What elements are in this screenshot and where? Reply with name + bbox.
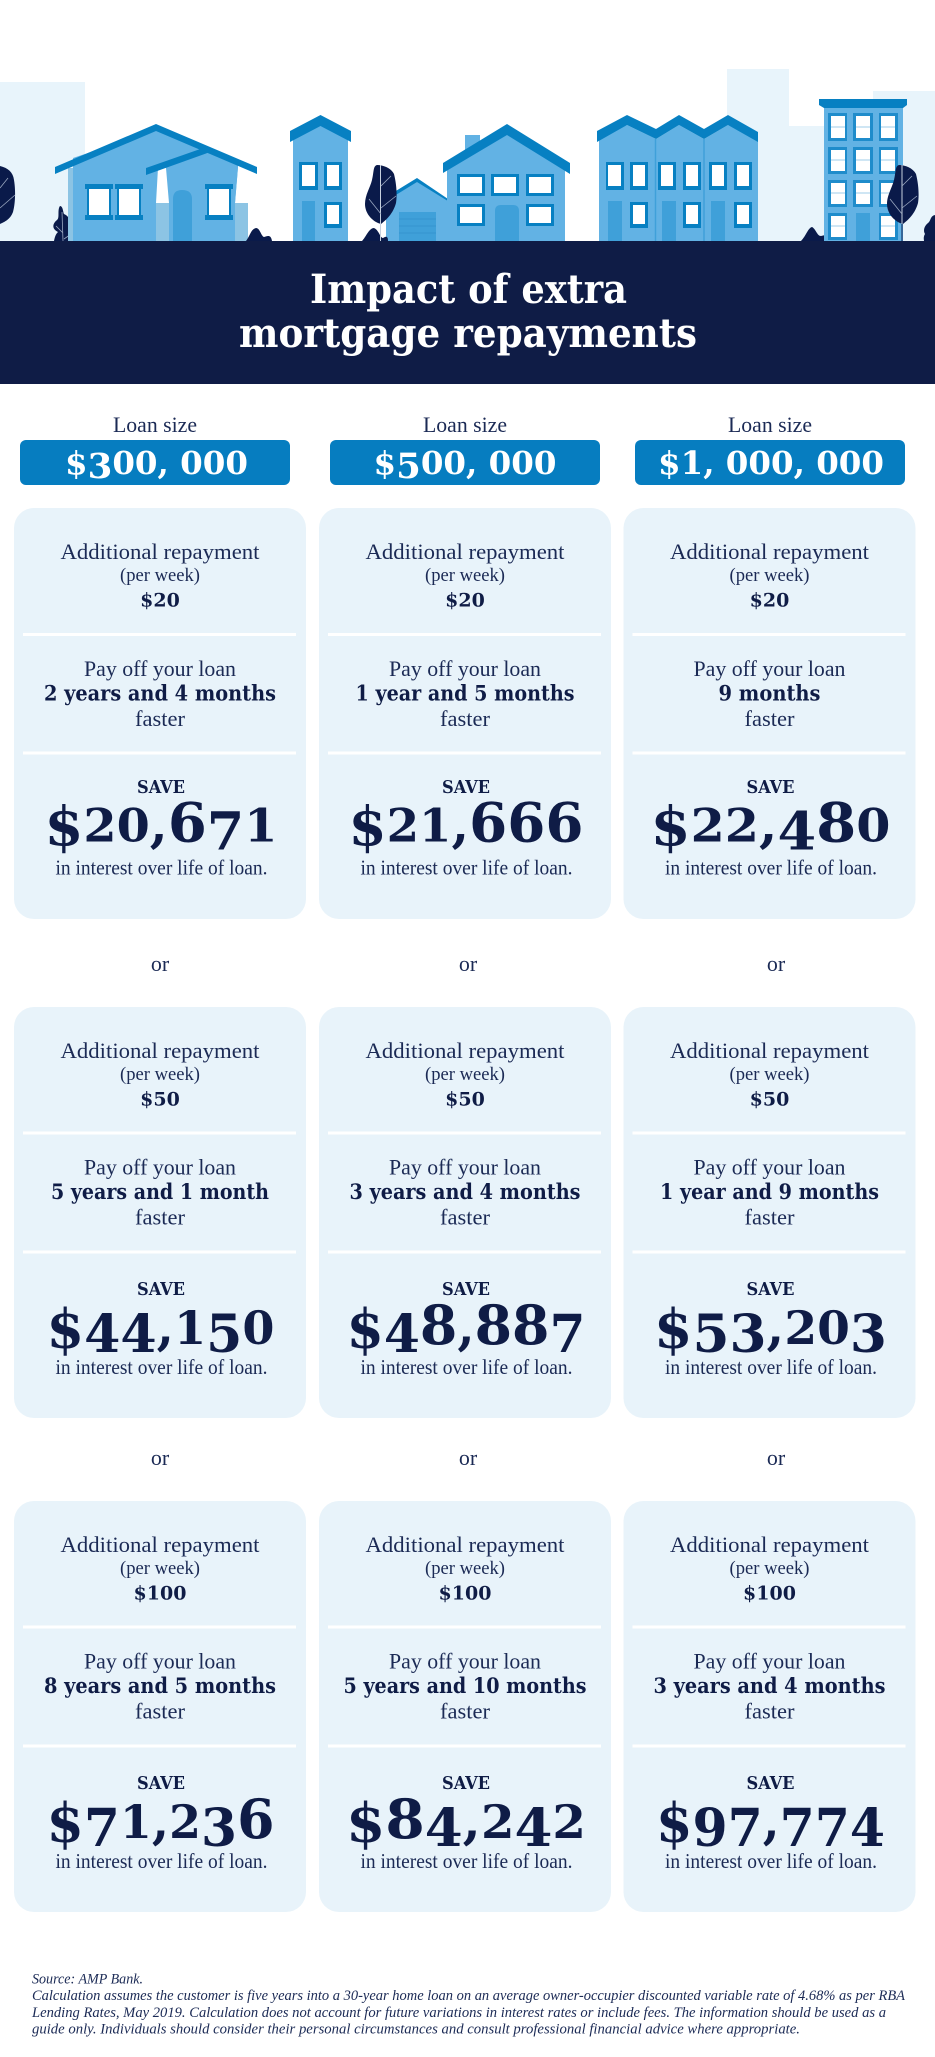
card: $500,000 at $50 per week: $48,887 [346, 1293, 585, 1365]
card: $300,000 at $100 per week: 8 years and 5 months [44, 1673, 276, 1698]
right tree [887, 165, 919, 241]
card: $1,000,000 at $50 per week: faster [744, 1204, 795, 1230]
source and disclaimer footnote: Calculation assumes the customer is five years into a 30-year home loan on an average owner-occupier discounted variable rate of 4.68% as per RBA [32, 1988, 905, 2004]
card: $500,000 at $50 per week [319, 1007, 611, 1418]
card: $500,000 at $20 per week: $21,666 [348, 790, 584, 858]
card: $500,000 at $50 per week: Pay off your loan [389, 1154, 541, 1180]
house 1: bungalow [55, 124, 257, 241]
card: $1,000,000 at $100 per week: 3 years and 4 months [654, 1673, 886, 1698]
or separators row 2: or [767, 1445, 786, 1470]
card: $1,000,000 at $100 per week [624, 1501, 916, 1912]
card: $500,000 at $50 per week: Additional repayment [366, 1038, 564, 1063]
or separators row 1: or [767, 951, 786, 976]
card: $1,000,000 at $50 per week: Pay off your loan [694, 1154, 846, 1180]
card: $1,000,000 at $50 per week: SAVE [746, 1279, 794, 1300]
background buildings [0, 69, 935, 242]
card: $300,000 at $20 per week: $20,671 [44, 790, 278, 862]
card: $300,000 at $50 per week: Pay off your loan [84, 1154, 236, 1180]
card: $300,000 at $50 per week: Additional repayment [60, 1038, 260, 1063]
card: $1,000,000 at $100 per week: (per week) [730, 1559, 810, 1579]
card: $300,000 at $50 per week: $50 [140, 1088, 180, 1110]
card: $1,000,000 at $50 per week: 1 year and 9 months [660, 1179, 879, 1204]
or separators row 2: or [459, 1445, 478, 1470]
card: $500,000 at $100 per week: 5 years and 10 months [344, 1673, 586, 1698]
house 5: terrace row [597, 115, 758, 241]
card: $300,000 at $50 per week: 5 years and 1 month [51, 1179, 269, 1204]
card: $1,000,000 at $50 per week: $53,203 [654, 1297, 887, 1365]
house 2: tall narrow [290, 115, 351, 241]
card: $1,000,000 at $20 per week: Pay off your loan [694, 656, 846, 681]
card: $500,000 at $20 per week: Pay off your loan [389, 656, 541, 681]
card: $1,000,000 at $50 per week: (per week) [730, 1065, 810, 1085]
card: $1,000,000 at $50 per week: in interest over life of loan. [665, 1355, 877, 1379]
card: $500,000 at $50 per week: 3 years and 4 months [350, 1179, 580, 1204]
card: $300,000 at $100 per week: $100 [134, 1582, 186, 1604]
card: $300,000 at $100 per week: $71,236 [46, 1787, 274, 1859]
card: $500,000 at $50 per week: in interest over life of loan. [360, 1355, 572, 1379]
or separators row 1 [151, 951, 786, 976]
card: $1,000,000 at $20 per week: $20 [750, 590, 789, 612]
or separators row 2 [151, 1445, 786, 1470]
card: $300,000 at $50 per week: (per week) [120, 1065, 200, 1085]
card: $1,000,000 at $20 per week: in interest over life of loan. [665, 856, 877, 880]
card: $500,000 at $50 per week: $50 [445, 1088, 485, 1110]
card: $300,000 at $20 per week: (per week) [120, 566, 200, 586]
title text [239, 266, 697, 357]
card: $500,000 at $20 per week: SAVE [442, 777, 490, 798]
card: $300,000 at $100 per week: Additional repayment [60, 1532, 260, 1557]
card: $500,000 at $50 per week: SAVE [442, 1279, 490, 1300]
card: $1,000,000 at $50 per week: $50 [750, 1088, 789, 1110]
bush right [801, 227, 829, 241]
card: $500,000 at $20 per week: faster [440, 706, 491, 731]
card: $500,000 at $100 per week: (per week) [425, 1559, 505, 1579]
card: $300,000 at $20 per week: Pay off your loan [84, 656, 236, 681]
card: $1,000,000 at $100 per week: SAVE [746, 1773, 794, 1794]
header illustration: skyline of houses [0, 69, 935, 242]
title text: mortgage repayments [239, 310, 697, 357]
card: $1,000,000 at $20 per week: 9 months [718, 680, 820, 706]
or separators row 2: or [151, 1445, 170, 1470]
card: $300,000 at $100 per week: (per week) [120, 1559, 200, 1579]
card: $500,000 at $100 per week: SAVE [442, 1773, 490, 1794]
card: $300,000 at $50 per week [14, 1007, 306, 1418]
loan size header: $300,000: Loan size [113, 412, 197, 437]
card: $500,000 at $100 per week: in interest over life of loan. [360, 1849, 572, 1873]
small left bush tree [53, 206, 74, 241]
house 3: garage [386, 178, 451, 241]
loan size header: $500,000: $500, 000 [374, 444, 556, 487]
card: $1,000,000 at $50 per week [624, 1007, 916, 1418]
far right bush [924, 215, 935, 241]
loan size header: $500,000: Loan size [423, 412, 507, 437]
house 4: two storey with chimney [443, 124, 570, 241]
card: $300,000 at $20 per week: $20 [140, 590, 180, 612]
loan size header: $300,000 [20, 412, 290, 487]
card: $1,000,000 at $100 per week: $100 [743, 1582, 796, 1604]
tree and bush centre [362, 165, 397, 241]
card: $300,000 at $20 per week: in interest over life of loan. [56, 856, 268, 880]
card: $300,000 at $100 per week [14, 1501, 306, 1912]
card: $500,000 at $100 per week: $84,242 [346, 1787, 586, 1859]
card: $300,000 at $100 per week: in interest over life of loan. [56, 1849, 268, 1873]
loan size header: $300,000: $300, 000 [65, 444, 248, 487]
card: $1,000,000 at $20 per week [624, 508, 916, 919]
loan size header: $1,000,000 [635, 412, 905, 485]
card: $1,000,000 at $100 per week: $97,774 [656, 1791, 885, 1859]
card: $300,000 at $100 per week: Pay off your loan [84, 1648, 236, 1674]
card: $500,000 at $100 per week: faster [440, 1698, 491, 1724]
loan size header: $1,000,000: Loan size [728, 412, 812, 437]
card: $500,000 at $50 per week: (per week) [425, 1065, 505, 1085]
card: $500,000 at $20 per week [319, 508, 611, 919]
source and disclaimer footnote: Source: AMP Bank. [32, 1972, 143, 1988]
card: $300,000 at $100 per week: SAVE [137, 1773, 185, 1794]
card: $300,000 at $20 per week [14, 508, 306, 919]
card: $500,000 at $100 per week [319, 1501, 611, 1912]
card: $1,000,000 at $100 per week: faster [744, 1698, 795, 1724]
card: $1,000,000 at $50 per week: Additional repayment [670, 1038, 869, 1063]
card: $300,000 at $20 per week: SAVE [137, 777, 185, 798]
card: $300,000 at $100 per week: faster [135, 1698, 186, 1724]
card: $1,000,000 at $20 per week: Additional repayment [670, 539, 869, 564]
loan size header: $500,000 [330, 412, 600, 487]
source and disclaimer footnote: Lending Rates, May 2019. Calculation does not account for future variations in interest rates or include fees. The information should be used as a [31, 2005, 886, 2021]
card: $1,000,000 at $20 per week: faster [744, 706, 795, 731]
left tree [0, 166, 15, 224]
card: $1,000,000 at $100 per week: Pay off your loan [694, 1648, 846, 1674]
card: $500,000 at $20 per week: 1 year and 5 months [356, 680, 574, 706]
card: $500,000 at $100 per week: Additional repayment [366, 1532, 564, 1557]
source and disclaimer footnote [31, 1972, 905, 2038]
card: $300,000 at $50 per week: in interest over life of loan. [56, 1355, 268, 1379]
card: $300,000 at $50 per week: $44,150 [46, 1297, 274, 1365]
card: $1,000,000 at $100 per week: in interest over life of loan. [665, 1849, 877, 1873]
card: $500,000 at $100 per week: Pay off your loan [389, 1648, 541, 1674]
card: $1,000,000 at $20 per week: (per week) [730, 566, 810, 586]
apartment building [819, 99, 907, 241]
card: $500,000 at $100 per week: $100 [439, 1582, 491, 1604]
loan size header: $1,000,000: $1, 000, 000 [658, 444, 884, 482]
or separators row 1: or [151, 951, 170, 976]
or separators row 1: or [459, 951, 478, 976]
card: $300,000 at $20 per week: 2 years and 4 months [44, 680, 276, 706]
card: $500,000 at $20 per week: in interest over life of loan. [360, 856, 572, 880]
card: $500,000 at $20 per week: (per week) [425, 566, 505, 586]
card: $500,000 at $20 per week: $20 [445, 590, 485, 612]
source and disclaimer footnote: guide only. Individuals should consider their personal circumstances and consult professional financial advice where appropriate. [32, 2022, 800, 2038]
card: $500,000 at $20 per week: Additional repayment [366, 539, 564, 564]
card: $1,000,000 at $20 per week: $22,480 [650, 790, 890, 862]
card: $1,000,000 at $20 per week: SAVE [746, 777, 794, 798]
card: $500,000 at $50 per week: faster [440, 1204, 491, 1230]
bush [246, 228, 272, 241]
title banner [0, 241, 935, 384]
card: $1,000,000 at $100 per week: Additional repayment [670, 1532, 869, 1557]
card: $300,000 at $20 per week: faster [135, 706, 186, 731]
card: $300,000 at $50 per week: faster [135, 1204, 186, 1230]
title text: Impact of extra [310, 266, 627, 313]
card: $300,000 at $50 per week: SAVE [137, 1279, 185, 1300]
card: $300,000 at $20 per week: Additional repayment [60, 539, 260, 564]
